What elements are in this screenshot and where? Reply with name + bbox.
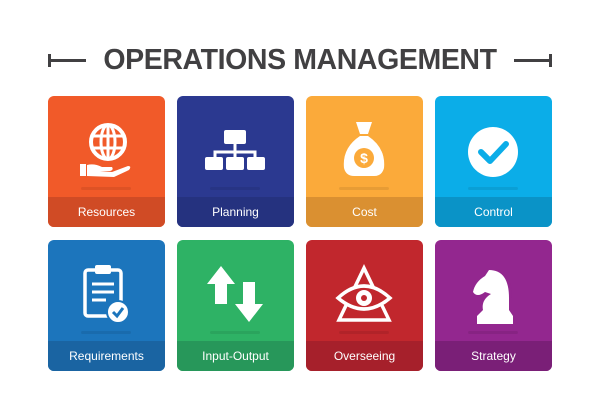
icon: chess knight: [473, 270, 513, 324]
panel: strategy: [435, 240, 552, 371]
panel: cost: Cost: [352, 205, 377, 219]
panel: resources: [48, 96, 165, 227]
icon: check circle: [468, 127, 518, 177]
panel: overseeing: [306, 240, 423, 371]
icon: up/down arrows: [207, 266, 263, 322]
title: OPERATIONS MANAGEMENT: [103, 44, 497, 76]
panel: control: [435, 96, 552, 227]
panel: overseeing: Overseeing: [334, 349, 395, 363]
icon: org chart: [205, 130, 265, 170]
panel: input-output: [177, 240, 294, 371]
panel: requirements: Requirements: [69, 349, 144, 363]
panel: control: Control: [474, 205, 513, 219]
panel: strategy: Strategy: [471, 349, 516, 363]
panel: planning: Planning: [212, 205, 259, 219]
panel: requirements: [48, 240, 165, 371]
panel: cost: [306, 96, 423, 227]
panel: planning: [177, 96, 294, 227]
icon: money bag: $: [360, 150, 368, 166]
icon: eye in triangle: [336, 264, 392, 322]
panel: input-output: Input-Output: [202, 349, 269, 363]
icon: clipboard: [83, 265, 128, 322]
icon: globe in hand: [80, 123, 130, 177]
panel: resources: Resources: [78, 205, 135, 219]
icon: money bag: [344, 122, 384, 176]
